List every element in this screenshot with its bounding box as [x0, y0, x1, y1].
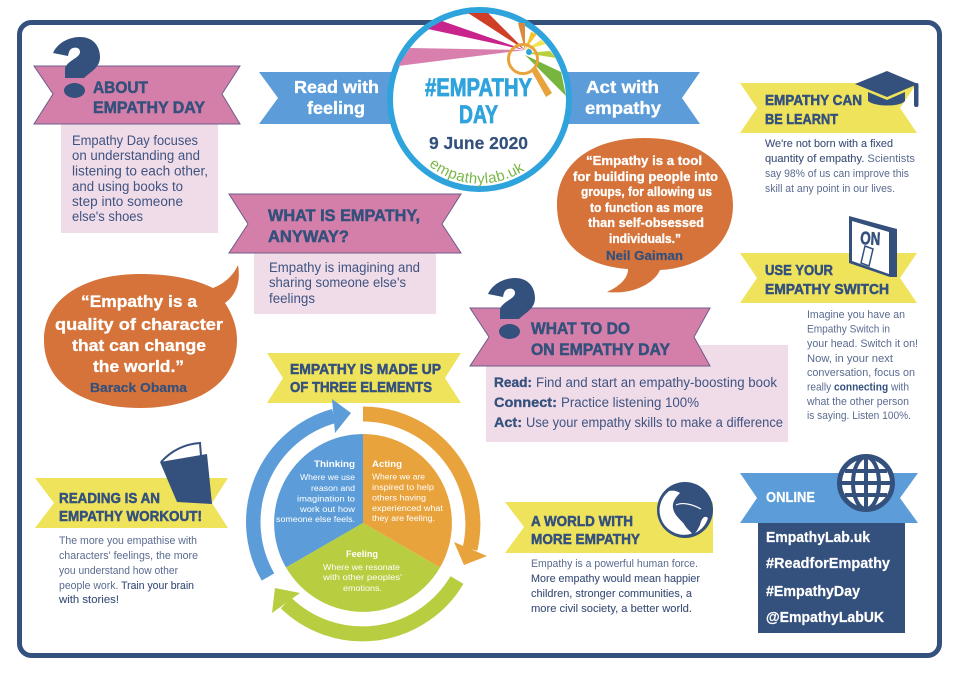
body text: is saying. Listen 100%. [807, 410, 911, 422]
pie segment: feeling: Feeling [346, 549, 378, 560]
body text: more civil society, a better world. [531, 603, 692, 615]
ribbon: read with feeling: Read with [294, 77, 379, 97]
pie segment: thinking: reason and [311, 483, 355, 493]
ribbon heading: MORE EMPATHY [531, 532, 640, 548]
quote bubble: Neil Gaiman: individuals.” [609, 232, 681, 246]
ribbon heading [35, 478, 228, 528]
arrow: blue [253, 399, 351, 577]
icon: question mark [53, 37, 100, 98]
pie segment: thinking: imagination to [297, 494, 355, 504]
pie segment: acting: inspired to help [372, 482, 434, 492]
body text: on understanding and [72, 148, 200, 163]
body text: Empathy Switch in [807, 324, 890, 336]
quote bubble: Neil Gaiman [557, 138, 733, 292]
pie segment: acting: Where we are [372, 472, 425, 482]
body text: really connecting with [807, 382, 909, 394]
body text [58, 535, 198, 606]
body text: conversation, focus on [807, 367, 915, 379]
central badge: #EmpathyDay: empathylab.uk [430, 160, 525, 187]
ribbon heading: EMPATHY IS MADE UP [290, 362, 441, 378]
ribbon heading [470, 308, 710, 366]
body text: The more you empathise with [59, 535, 197, 547]
links box: @EmpathyLabUK [766, 610, 884, 626]
body text [806, 309, 918, 422]
panel: online [740, 456, 918, 633]
body text: and using books to [72, 179, 183, 194]
ribbon heading [505, 502, 713, 553]
text box [486, 345, 788, 442]
body text [269, 260, 420, 306]
action list: Connect: [494, 394, 557, 410]
body text: More empathy would mean happier [531, 573, 700, 585]
quote bubble: Barack Obama: the world.” [93, 357, 184, 376]
action list [494, 374, 783, 430]
body text: say 98% of us can improve this [765, 168, 909, 180]
pie segment: acting: others having [372, 492, 426, 502]
links box: #EmpathyDay [766, 584, 860, 600]
panel: a world with more empathy [505, 482, 713, 615]
body text: Empathy is a powerful human force. [531, 558, 698, 570]
ribbon heading [740, 83, 917, 133]
pie segment: feeling: Where we resonate [323, 562, 400, 572]
body text: listening to each other, [72, 164, 208, 178]
panel: what to do on empathy day [470, 278, 788, 442]
icon: rainbow rays through magnifying glass [398, 13, 566, 97]
icon: graduation cap [855, 71, 918, 107]
body text: else's shoes [72, 209, 143, 224]
panel: about empathy day [34, 37, 240, 233]
action list: Use your empathy skills to make a difference [526, 415, 783, 430]
quote bubble: Barack Obama: that can change [72, 336, 206, 355]
ribbon: act with empathy: Act with [586, 77, 659, 97]
ribbon heading: EMPATHY WORKOUT! [59, 509, 202, 525]
pie segment: feeling [286, 523, 440, 612]
pie segment: acting: Acting [372, 459, 402, 470]
panel: what is empathy, anyway [229, 194, 461, 314]
ribbon heading: USE YOUR [765, 263, 833, 279]
ribbon heading: BE LEARNT [765, 112, 838, 128]
quote bubble: Neil Gaiman: to function as more [590, 201, 703, 215]
text box [61, 124, 218, 233]
icon: on switch [849, 216, 897, 277]
ribbon heading: ANYWAY? [268, 228, 349, 246]
text box [254, 252, 436, 314]
body text: step into someone [72, 194, 183, 209]
body text: feelings [269, 291, 315, 306]
ribbon heading [740, 253, 917, 303]
ribbon heading: WHAT TO DO [531, 320, 630, 338]
body text: you understand how other [59, 565, 178, 577]
icon: book [160, 443, 212, 504]
quote bubble: Neil Gaiman: “Empathy is a tool [586, 154, 702, 168]
ribbon heading: READING IS AN [59, 491, 160, 507]
central badge: #EmpathyDay [387, 7, 572, 192]
quote bubble: Neil Gaiman: groups, for allowing us [581, 185, 712, 199]
quote bubble: Neil Gaiman: than self-obsessed [588, 216, 704, 230]
panel: empathy can be learnt [740, 71, 918, 195]
ribbon heading: ONLINE [766, 490, 815, 506]
quote bubble: Neil Gaiman: for building people into [573, 170, 718, 184]
body text [531, 558, 700, 615]
ribbon heading: WHAT IS EMPATHY, [268, 207, 420, 225]
body text: sharing someone else's [269, 275, 406, 290]
arrow: green [272, 580, 457, 634]
pie segment: feeling: emotions. [343, 583, 382, 593]
icon: on switch: ON [860, 228, 881, 249]
body text: what the other person [806, 396, 909, 408]
body text [72, 133, 208, 224]
quote bubble: Barack Obama: Barack Obama [90, 380, 188, 395]
ribbon: act with empathy [565, 72, 700, 124]
central badge: #EmpathyDay: DAY [459, 101, 498, 129]
panel: empathy is made up of three elements [253, 353, 487, 634]
ribbon heading: ON EMPATHY DAY [531, 341, 670, 359]
ribbon heading: OF THREE ELEMENTS [290, 380, 432, 396]
links box: EmpathyLab.uk [766, 530, 871, 546]
pie segment: thinking: Thinking [314, 459, 355, 470]
ribbon: read with feeling [259, 72, 395, 124]
ribbon heading [267, 353, 461, 403]
body text: Imagine you have an [807, 309, 905, 321]
ribbon heading [34, 66, 240, 124]
body text: quantity of empathy. Scientists [765, 153, 915, 165]
panel: reading is an empathy workout [35, 443, 228, 606]
quote bubble: Barack Obama [44, 265, 239, 408]
pie segment: acting: experienced what [372, 503, 444, 513]
action list: Read: [494, 374, 532, 390]
action list: Practice listening 100% [561, 395, 699, 410]
body text: children, stronger communities, a [531, 588, 693, 600]
icon: globe [840, 456, 892, 510]
pie segment: thinking: Where we use [300, 472, 355, 482]
pie segment: thinking: work out how [299, 504, 356, 514]
body text: skill at any point in our lives. [765, 183, 895, 195]
pie segment: feeling: with other peoples' [322, 572, 402, 582]
quote bubble: Barack Obama: quality of character [55, 315, 223, 334]
action list: Find and start an empathy-boosting book [536, 375, 777, 390]
pie segment: thinking [274, 434, 363, 568]
links box [758, 523, 905, 633]
ribbon heading [740, 473, 918, 523]
ribbon: act with empathy: empathy [585, 98, 661, 118]
icon: question mark [488, 278, 535, 339]
ribbon heading: EMPATHY CAN [765, 93, 862, 109]
ribbon: read with feeling: feeling [307, 98, 365, 118]
pie segment: thinking: someone else feels. [276, 514, 355, 524]
body text: your head. Switch it on! [807, 338, 918, 350]
body text [765, 138, 915, 195]
body text: characters' feelings, the more [59, 550, 198, 562]
central badge: #EmpathyDay: 9 June 2020 [429, 133, 528, 153]
quote bubble: Barack Obama: “Empathy is a [81, 292, 198, 311]
ribbon heading [229, 194, 461, 253]
pie segment: acting: they are feeling. [372, 513, 435, 523]
body text: Empathy Day focuses [72, 133, 198, 148]
arrow: orange [363, 414, 487, 565]
links box: #ReadforEmpathy [766, 556, 890, 572]
panel: use your empathy switch [740, 216, 918, 422]
body text: Now, in your next [807, 353, 893, 365]
body text: with stories! [58, 594, 119, 606]
ribbon heading: EMPATHY SWITCH [765, 282, 889, 298]
ribbon heading: A WORLD WITH [531, 514, 633, 530]
quote bubble: Neil Gaiman: Neil Gaiman [606, 249, 683, 263]
ribbon heading: EMPATHY DAY [93, 99, 205, 117]
ribbon heading: ABOUT [93, 79, 148, 97]
body text: We're not born with a fixed [765, 138, 893, 150]
body text: Empathy is imagining and [269, 260, 420, 275]
body text: people work. Train your brain [59, 580, 194, 592]
action list: Act: [494, 414, 522, 430]
icon: earth [657, 482, 713, 538]
pie segment: acting [363, 434, 452, 568]
central badge: #EmpathyDay: #EMPATHY [425, 74, 532, 102]
